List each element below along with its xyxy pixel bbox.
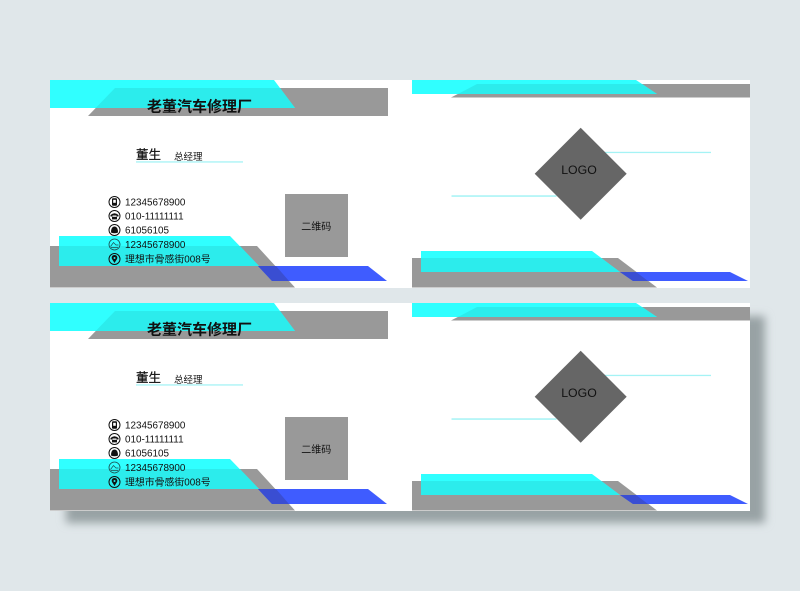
- back side: top band: [412, 80, 750, 98]
- front side: bottom shapes: [50, 459, 387, 510]
- front side: top band: [50, 80, 388, 116]
- wechat row: 12345678900: [125, 240, 186, 251]
- drop shadow of lower card: [66, 316, 765, 523]
- back side: accent lines: [452, 152, 711, 197]
- front side: person name and title: 董生: [136, 371, 161, 385]
- front side: contact list: [109, 420, 211, 488]
- back side: accent lines: [452, 375, 711, 420]
- mobile row: 12345678900: [125, 420, 186, 432]
- back side: bottom shapes: [412, 251, 748, 288]
- front side: QR code placeholder: 二维码: [301, 220, 331, 233]
- back side: bottom shapes: [412, 474, 748, 510]
- front side: person name and title: 总经理: [174, 374, 203, 386]
- front side: person name and title: [136, 148, 243, 163]
- front side: contact list: [109, 196, 211, 266]
- front side: QR code placeholder: [285, 417, 348, 480]
- upper card: [50, 80, 750, 288]
- back side: top band: [412, 303, 750, 320]
- back side: logo diamond: LOGO: [561, 386, 597, 400]
- front side: top band: [50, 303, 388, 339]
- back side: logo diamond: LOGO: [561, 163, 597, 177]
- QQ row: 61056105: [125, 448, 169, 460]
- QQ row: 61056105: [125, 226, 169, 236]
- address row: 理想市骨感街008号: [125, 476, 211, 488]
- back side: logo diamond: [535, 351, 627, 443]
- telephone row: 010-11111111: [125, 434, 184, 446]
- telephone row: 010-11111111: [125, 212, 184, 222]
- lower card: [50, 303, 750, 511]
- front side: QR code placeholder: 二维码: [301, 443, 331, 456]
- address row: 理想市骨感街008号: [125, 252, 211, 266]
- wechat row: 12345678900: [125, 463, 186, 474]
- front side: bottom shapes: [50, 236, 387, 288]
- back side: logo diamond: [535, 128, 627, 220]
- front side: person name and title: [136, 371, 243, 386]
- front side: person name and title: 董生: [136, 148, 161, 162]
- front side: company name: 老董汽车修理厂: [147, 320, 252, 338]
- mobile row: 12345678900: [125, 198, 186, 208]
- front side: person name and title: 总经理: [174, 151, 203, 163]
- front side: QR code placeholder: [285, 194, 348, 257]
- front side: company name: 老董汽车修理厂: [147, 98, 252, 116]
